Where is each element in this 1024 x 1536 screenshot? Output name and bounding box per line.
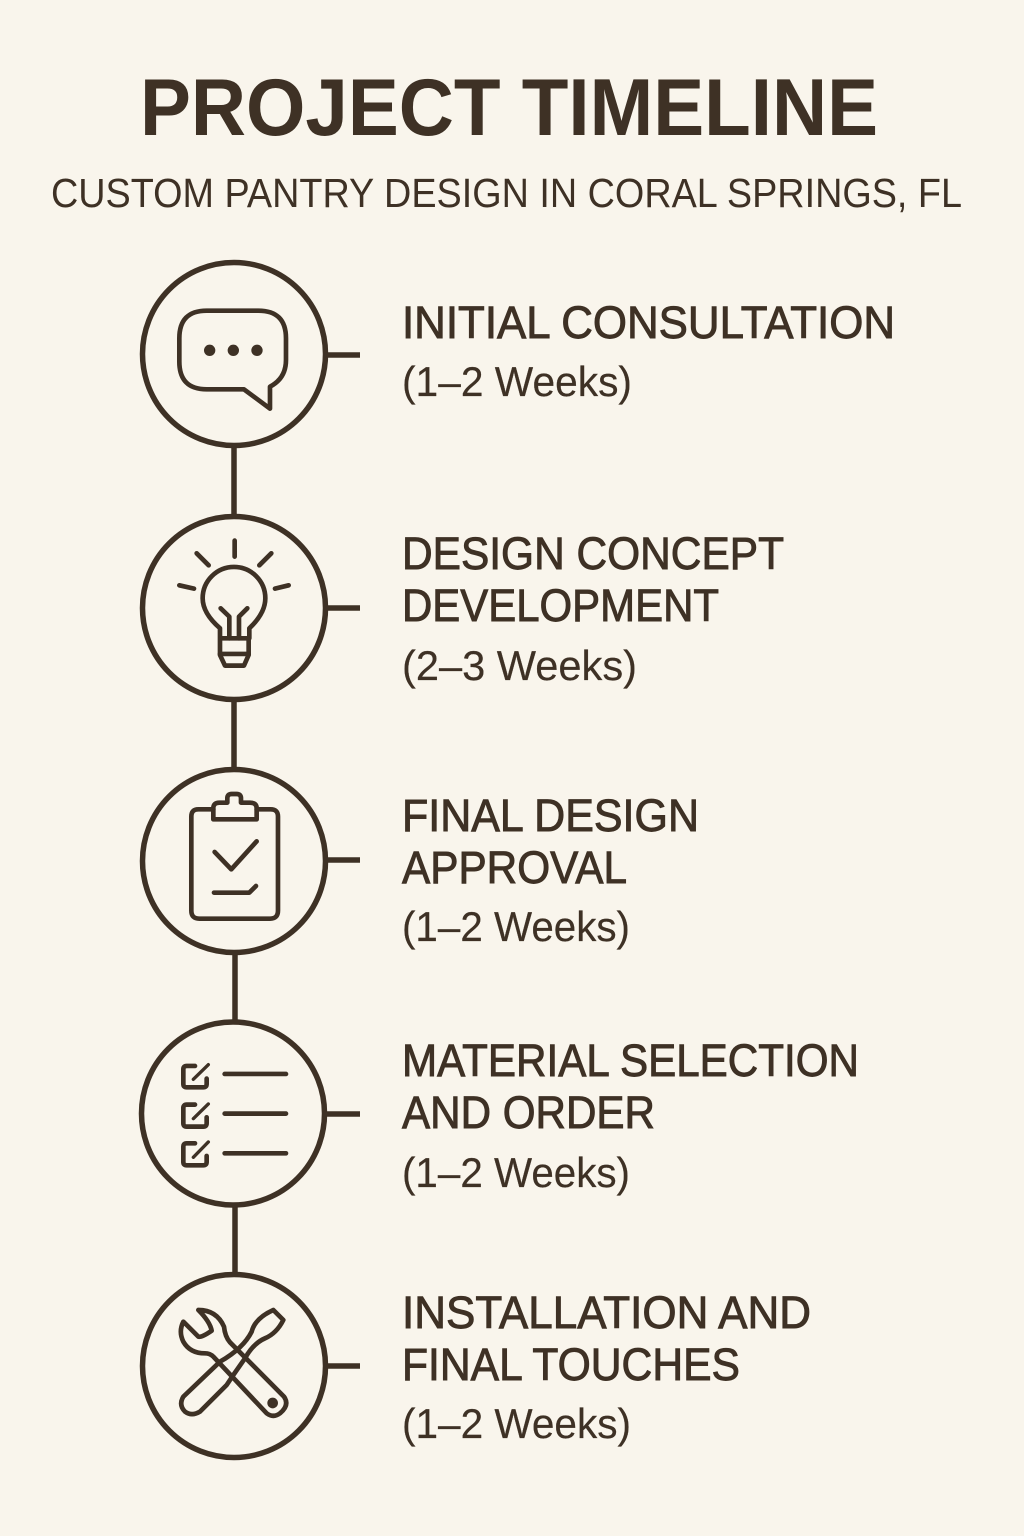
step 4 heading: MATERIAL SELECTION <box>402 1035 859 1086</box>
step 3 duration: (1–2 Weeks) <box>402 903 630 950</box>
step 2: design concept development <box>142 516 784 700</box>
step 4 duration: (1–2 Weeks) <box>402 1149 630 1196</box>
step 4: material selection and order: AND ORDER <box>402 1087 655 1138</box>
step 2: design concept development: DEVELOPMENT <box>402 580 719 631</box>
timeline connectors <box>234 447 235 1273</box>
step 3: final design approval: APPROVAL <box>402 842 627 893</box>
step 2 heading: DESIGN CONCEPT <box>402 528 784 579</box>
icon: clipboard <box>191 794 278 919</box>
icon: wrench and screwdriver <box>181 1310 286 1416</box>
title: PROJECT TIMELINE <box>140 63 878 153</box>
step 5 duration: (1–2 Weeks) <box>402 1400 631 1447</box>
step 4: material selection and order <box>142 1022 859 1205</box>
subtitle: CUSTOM PANTRY DESIGN IN CORAL SPRINGS, FL <box>51 170 962 216</box>
step 5: installation and final touches: FINAL TOUCHES <box>402 1339 740 1390</box>
step 2 duration: (2–3 Weeks) <box>402 642 637 689</box>
icon: checklist <box>183 1065 286 1165</box>
step 1 heading: INITIAL CONSULTATION <box>402 297 895 348</box>
step 1: initial consultation <box>142 262 895 446</box>
icon: light bulb <box>179 541 289 666</box>
step 3 heading: FINAL DESIGN <box>402 790 699 841</box>
step 1 duration: (1–2 Weeks) <box>402 358 632 405</box>
step 3: final design approval <box>142 770 699 952</box>
step 5 heading: INSTALLATION AND <box>402 1287 811 1338</box>
step 5: installation and final touches <box>142 1274 811 1458</box>
icon: speech bubble <box>179 311 286 409</box>
